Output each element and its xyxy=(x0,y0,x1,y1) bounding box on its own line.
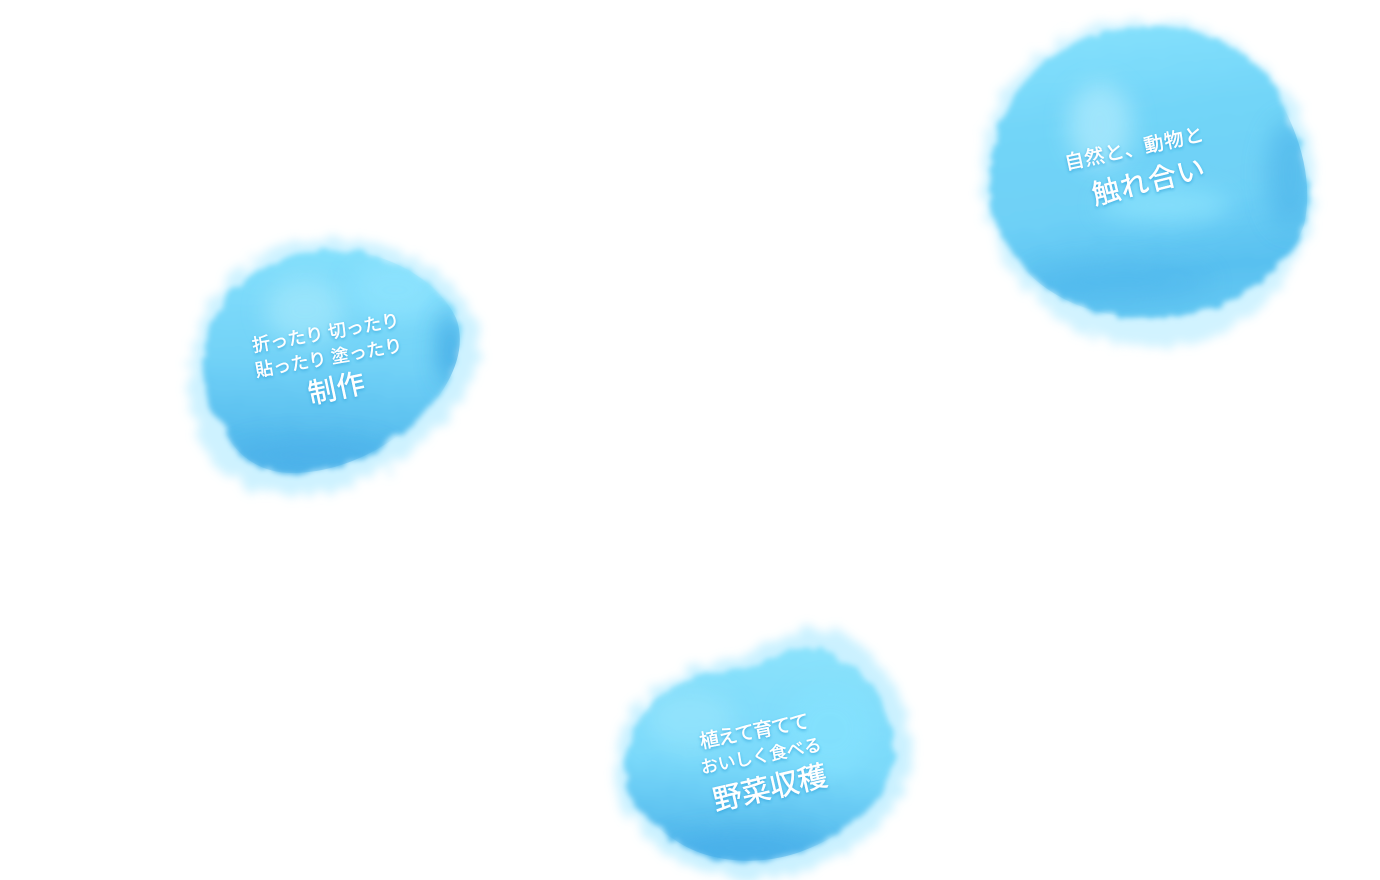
caption: 折ったり切ったり 貼ったり塗ったり 制作 xyxy=(251,310,404,410)
caption: 自然と、動物と 触れ合い: 自然と、動物と xyxy=(1063,123,1207,175)
caption: 植えて育てて おいしく食べる 野菜収穫 xyxy=(698,711,830,818)
caption: 折ったり切ったり 貼ったり塗ったり 制作: 制作 xyxy=(305,367,368,410)
caption: 折ったり切ったり 貼ったり塗ったり 制作: 貼ったり 塗ったり xyxy=(254,335,404,381)
caption: 植えて育てて おいしく食べる 野菜収穫: おいしく食べる xyxy=(699,734,823,778)
caption: 植えて育てて おいしく食べる 野菜収穫: 野菜収穫 xyxy=(710,759,830,818)
caption: 自然と、動物と 触れ合い: 触れ合い xyxy=(1089,152,1209,211)
watercolor blob: vegetable harvest xyxy=(615,628,912,878)
caption: 自然と、動物と 触れ合い xyxy=(1063,123,1209,211)
watercolor blob: nature and animals xyxy=(981,20,1315,348)
panel: 折ったり切ったり 制作 xyxy=(190,238,478,495)
caption: 植えて育てて おいしく食べる 野菜収穫: 植えて育てて xyxy=(698,711,810,753)
caption: 折ったり切ったり 貼ったり塗ったり 制作: 折ったり 切ったり xyxy=(251,310,401,356)
watercolor blob: craft xyxy=(190,238,478,495)
panel: 植えて育てて 野菜収穫 xyxy=(615,628,912,878)
panel: 自然と、動物と 触れ合い xyxy=(981,20,1315,348)
